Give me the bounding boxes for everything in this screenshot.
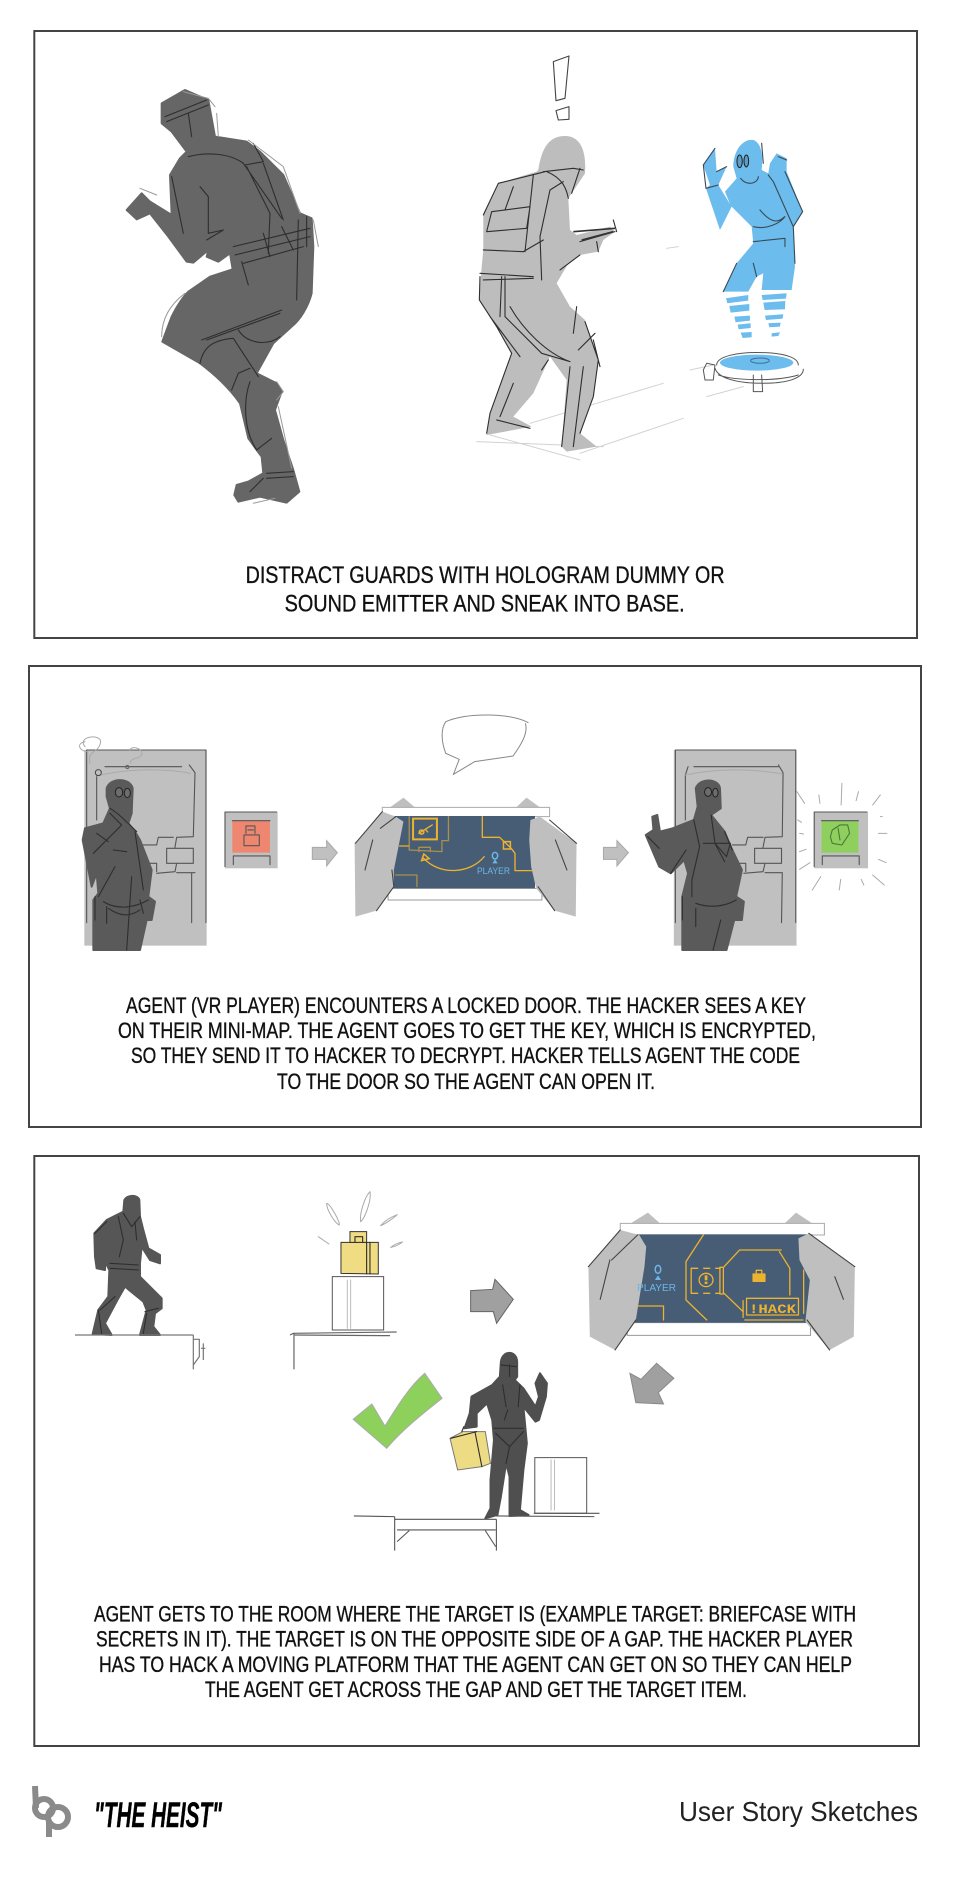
- figure: briefcase on pedestal: [290, 1192, 403, 1369]
- arrow: to hacker tablet: [471, 1279, 513, 1323]
- figure: sneaking agent: [127, 90, 318, 503]
- icon: hologram emitter base: [703, 353, 803, 392]
- icon: unlocked keypad green with glow rays: [797, 783, 887, 890]
- subtitle: user story sketches: User Story Sketches: [679, 1796, 918, 1827]
- icon: green check mark: [353, 1373, 442, 1448]
- arrow: to open door: [603, 841, 628, 866]
- arrow: to tablet: [312, 841, 337, 866]
- figure: tablet with hack button: [588, 1213, 855, 1350]
- caption: panel two: SO THEY SEND IT TO HACKER TO DECRYPT. HACKER TELLS AGENT THE CODE: [131, 1043, 800, 1068]
- label: hack button: !HACK: [749, 1302, 796, 1317]
- caption: panel three: [94, 1602, 856, 1702]
- arrow: down to agent: [630, 1363, 674, 1404]
- map: yellow rooms: [638, 1235, 804, 1320]
- logo: bp mark: [35, 1786, 68, 1837]
- caption: panel two: [118, 993, 816, 1094]
- caption: panel two: AGENT (VR PLAYER) ENCOUNTERS A LOCKED DOOR. THE HACKER SEES A KEY: [126, 993, 806, 1018]
- figure: agent at opening door: [646, 750, 797, 950]
- figure: agent carrying briefcase: [450, 1353, 547, 1518]
- caption: panel two: TO THE DOOR SO THE AGENT CAN OPEN IT.: [277, 1069, 655, 1094]
- panel: reach the target: [34, 1156, 919, 1746]
- label: player on map: PLAYER: [477, 866, 510, 876]
- panel: distract guards: [34, 31, 917, 638]
- speech bubble: [442, 715, 528, 774]
- figure: agent puzzled at door: [80, 737, 207, 950]
- caption: panel three: THE AGENT GET ACROSS THE GAP AND GET THE TARGET ITEM.: [205, 1677, 747, 1702]
- title: the heist: "THE HEIST": [94, 1796, 222, 1835]
- panel: locked door: [29, 666, 921, 1127]
- caption: panel two: ON THEIR MINI-MAP. THE AGENT GOES TO GET THE KEY, WHICH IS ENCRYPTED,: [118, 1018, 816, 1043]
- figure: gap platform and box: [354, 1458, 600, 1551]
- label: player on hack map: PLAYER: [637, 1283, 676, 1294]
- icon: locked keypad red: [225, 812, 278, 868]
- figure: guard with gun: [477, 136, 743, 460]
- icon: exclamation mark: [553, 56, 569, 120]
- figure: tablet with mini-map and key: [355, 798, 577, 917]
- caption: panel one: [246, 562, 725, 618]
- figure: blue hologram dummy: [703, 140, 803, 392]
- caption: panel one: SOUND EMITTER AND SNEAK INTO BASE.: [285, 590, 685, 618]
- map: yellow corridors and key: [396, 817, 532, 887]
- figure: agent walking on ledge: [75, 1196, 205, 1369]
- caption: panel one: DISTRACT GUARDS WITH HOLOGRAM DUMMY OR: [246, 562, 725, 589]
